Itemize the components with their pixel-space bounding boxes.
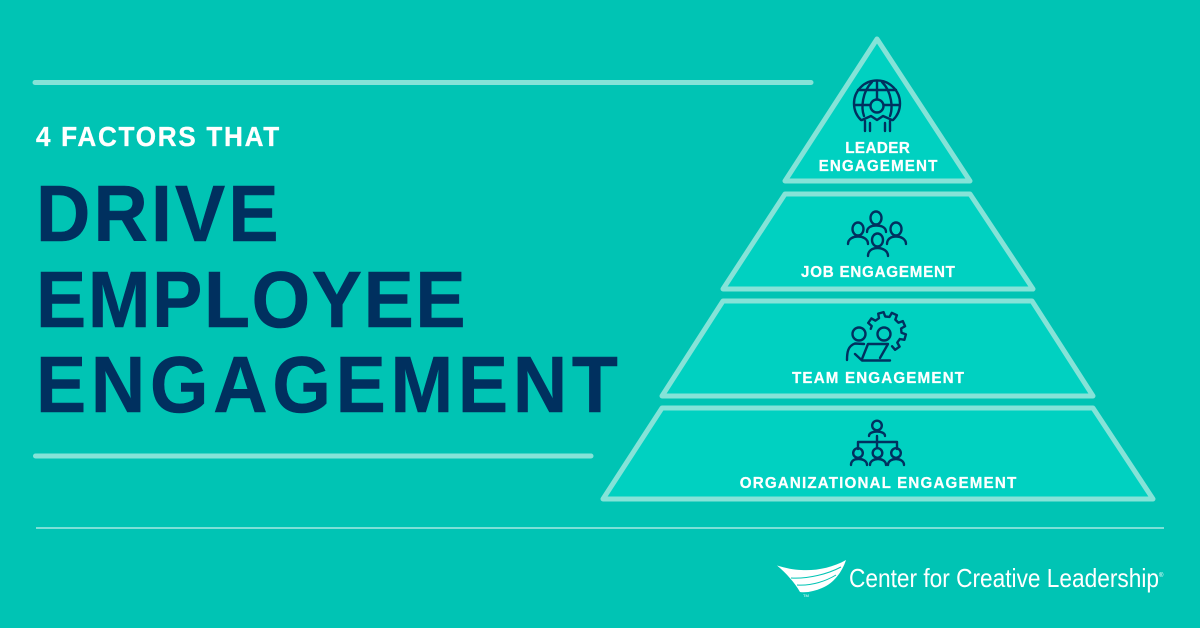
title <box>36 170 618 430</box>
label: JOB ENGAGEMENT <box>801 264 955 281</box>
label: TEAM ENGAGEMENT <box>792 370 964 387</box>
tier: job engagement <box>723 194 1033 289</box>
tier: leader engagement <box>785 39 970 181</box>
icon: globe with leader <box>854 80 900 131</box>
icon: person with laptop and gear <box>847 312 906 360</box>
icon: org chart <box>851 421 904 465</box>
title: EMPLOYEE <box>36 256 466 345</box>
icon: group of people <box>848 212 906 256</box>
title: ENGAGEMENT <box>36 341 618 430</box>
subtitle: 4 FACTORS THAT <box>36 121 280 152</box>
label: LEADER <box>845 140 910 157</box>
wordmark: Center for Creative Leadership <box>849 563 1159 593</box>
title: DRIVE <box>36 170 279 259</box>
icon: wing <box>777 560 846 592</box>
logo: Center for Creative Leadership: ® <box>1159 572 1164 579</box>
logo: Center for Creative Leadership <box>777 560 1164 598</box>
pyramid <box>603 39 1153 499</box>
trademark: TM <box>803 593 809 598</box>
label: ORGANIZATIONAL ENGAGEMENT <box>740 475 1017 492</box>
tier: organizational engagement <box>603 408 1153 499</box>
tier: leader engagement: ENGAGEMENT <box>819 158 938 175</box>
tier: team engagement <box>662 301 1093 396</box>
